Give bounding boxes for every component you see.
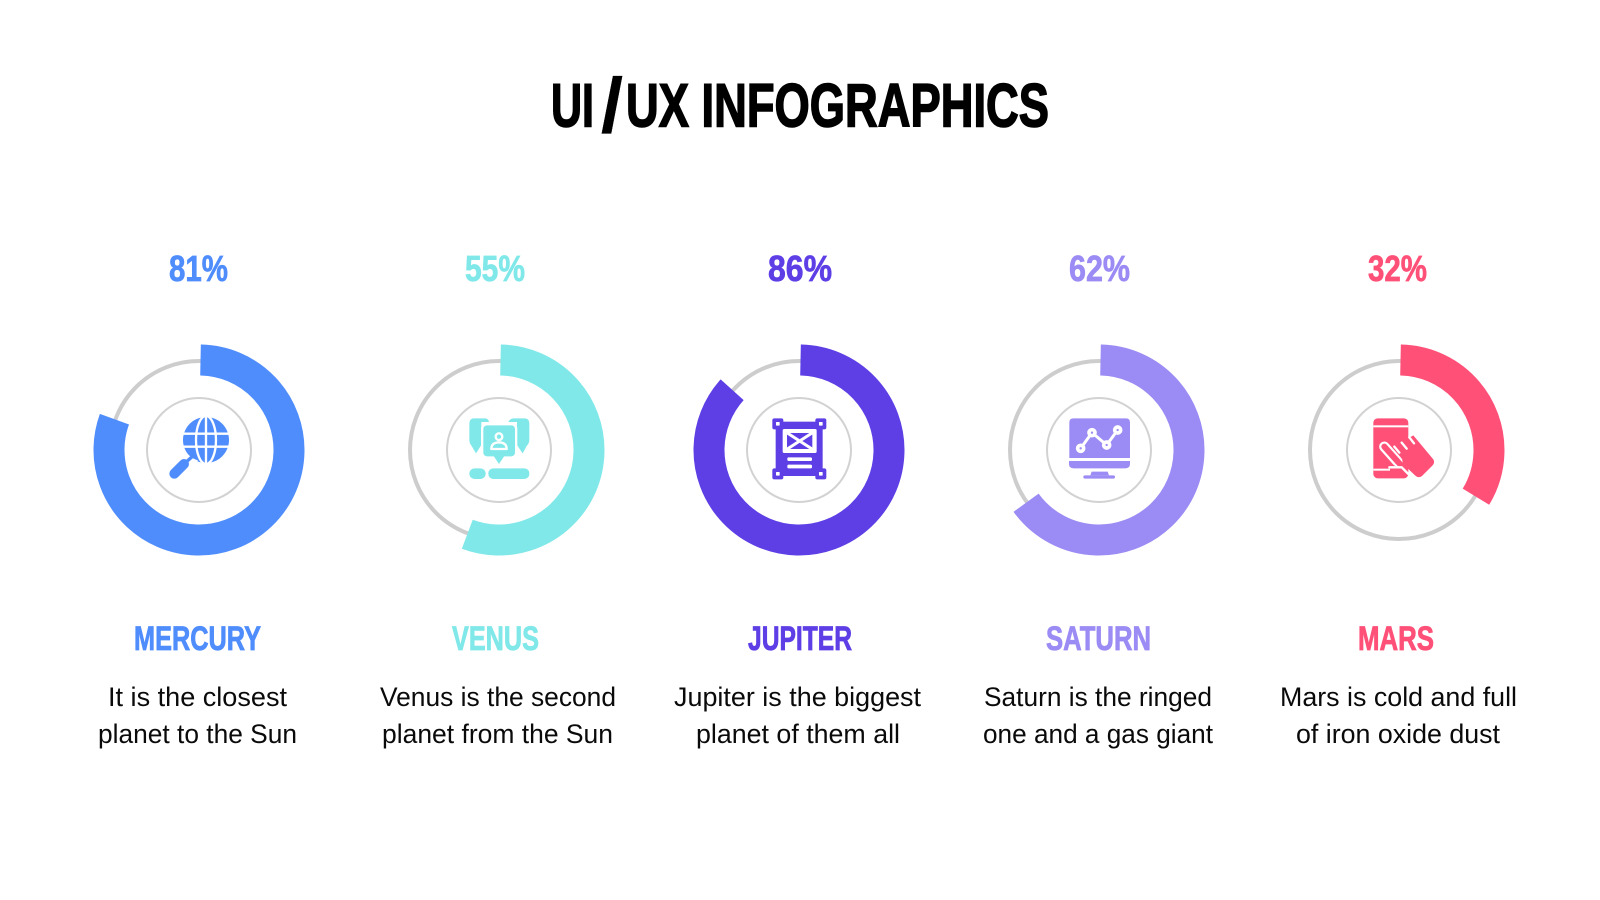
percentage: Jupiter: 86% — [768, 248, 832, 289]
name: Venus: VENUS — [452, 620, 539, 658]
description: Mercury: It is the closest — [108, 682, 288, 712]
name: Jupiter: JUPITER — [748, 620, 852, 658]
icon: wireframe layout — [772, 418, 826, 479]
title: UI — [551, 72, 594, 140]
icon: globe with magnifier — [174, 416, 231, 474]
description: Venus: planet from the Sun — [382, 719, 613, 749]
donut chart: Venus — [407, 358, 591, 542]
percentage: Saturn: 62% — [1069, 248, 1130, 289]
donut chart: Jupiter — [707, 358, 891, 542]
title — [551, 63, 1049, 149]
panel: Mercury — [98, 248, 297, 749]
description: Saturn: one and a gas giant — [983, 719, 1214, 749]
icon: monitor with line chart — [1069, 418, 1130, 479]
donut chart: Mars — [1307, 358, 1491, 542]
title: UX INFOGRAPHICS — [626, 72, 1049, 140]
title: / — [601, 63, 623, 149]
description: Jupiter — [674, 682, 922, 749]
percentage: Mars: 32% — [1368, 248, 1427, 289]
description: Saturn: Saturn is the ringed — [984, 682, 1212, 712]
name: Mars: MARS — [1358, 620, 1434, 658]
percentage: Mercury: 81% — [169, 248, 228, 289]
name: Saturn: SATURN — [1046, 620, 1151, 658]
panel: Venus — [380, 248, 616, 749]
name: Mercury: MERCURY — [134, 620, 261, 658]
description: Saturn — [983, 682, 1214, 749]
percentage: Venus: 55% — [465, 248, 525, 289]
description: Mars: Mars is cold and full — [1280, 682, 1517, 712]
donut chart: Saturn — [1007, 358, 1191, 542]
description: Venus — [380, 682, 616, 749]
description: Jupiter: Jupiter is the biggest — [674, 682, 922, 712]
description: Jupiter: planet of them all — [696, 719, 900, 749]
description: Mercury: planet to the Sun — [98, 719, 297, 749]
panel: Saturn — [983, 248, 1214, 749]
description: Mars: of iron oxide dust — [1296, 719, 1501, 749]
donut chart: Mercury — [107, 358, 291, 542]
description: Mars — [1280, 682, 1517, 749]
panel: Mars — [1280, 248, 1517, 749]
description: Mercury — [98, 682, 297, 749]
description: Venus: Venus is the second — [380, 682, 616, 712]
icon: hand tapping phone — [1373, 418, 1434, 478]
panel: Jupiter — [674, 248, 922, 749]
icon: chat bubbles with user — [469, 418, 529, 479]
